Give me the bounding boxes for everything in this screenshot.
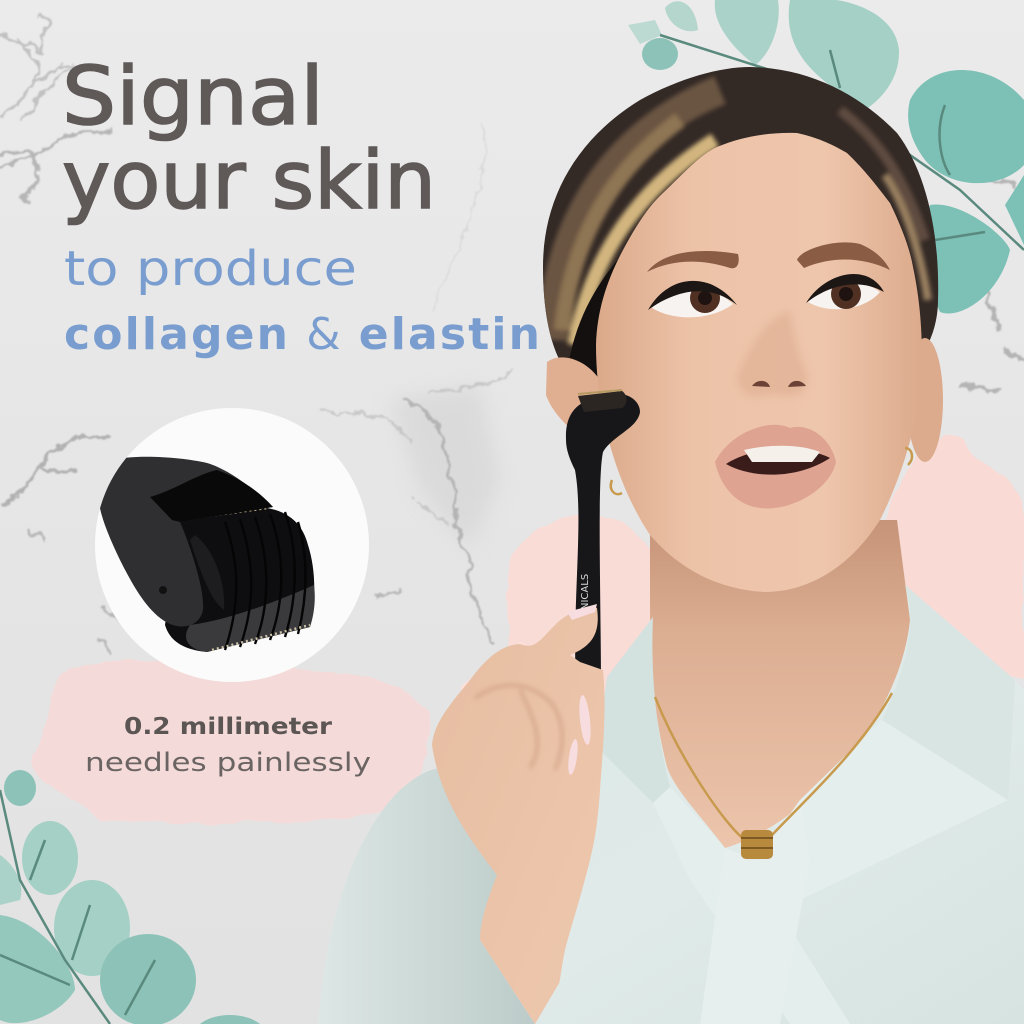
callout text — [85, 714, 371, 778]
model portrait — [318, 67, 1024, 1024]
face — [596, 133, 922, 592]
left ear — [546, 357, 605, 445]
eucalyptus leaves: top right — [628, 0, 1024, 313]
neck and chest — [650, 520, 910, 848]
product zoom circle with derma roller head — [95, 408, 369, 682]
eucalyptus leaves: bottom left — [0, 770, 260, 1024]
pink watercolor blobs behind the model — [460, 435, 1024, 700]
title — [62, 50, 436, 227]
subtitle: to produce — [64, 241, 357, 297]
hand holding the roller — [432, 604, 605, 1024]
callout text: 0.2 millimeter — [124, 714, 333, 740]
subtitle — [64, 241, 540, 360]
eyebrows — [647, 242, 890, 272]
right collar — [882, 585, 1015, 800]
nose — [737, 310, 808, 397]
pink callout brush background — [30, 660, 430, 823]
title: your skin — [62, 134, 436, 227]
left eye — [648, 281, 737, 317]
necklace — [655, 693, 892, 859]
subtitle: collagen & elastin — [64, 309, 540, 360]
title: Signal — [62, 50, 324, 143]
left collar band — [653, 787, 850, 1024]
derma roller in hand: NICALS — [580, 574, 591, 610]
earrings — [611, 448, 912, 494]
derma roller in hand — [566, 390, 640, 706]
undershirt — [700, 800, 810, 1024]
callout text: needles painlessly — [85, 748, 371, 778]
left sleeve shadow — [318, 768, 535, 1024]
right placket — [772, 720, 1008, 900]
right eye — [806, 274, 884, 309]
shirt body — [318, 585, 1024, 1024]
left collar — [597, 617, 670, 803]
hair — [543, 67, 938, 390]
right ear — [907, 338, 943, 462]
mouth — [715, 425, 836, 508]
